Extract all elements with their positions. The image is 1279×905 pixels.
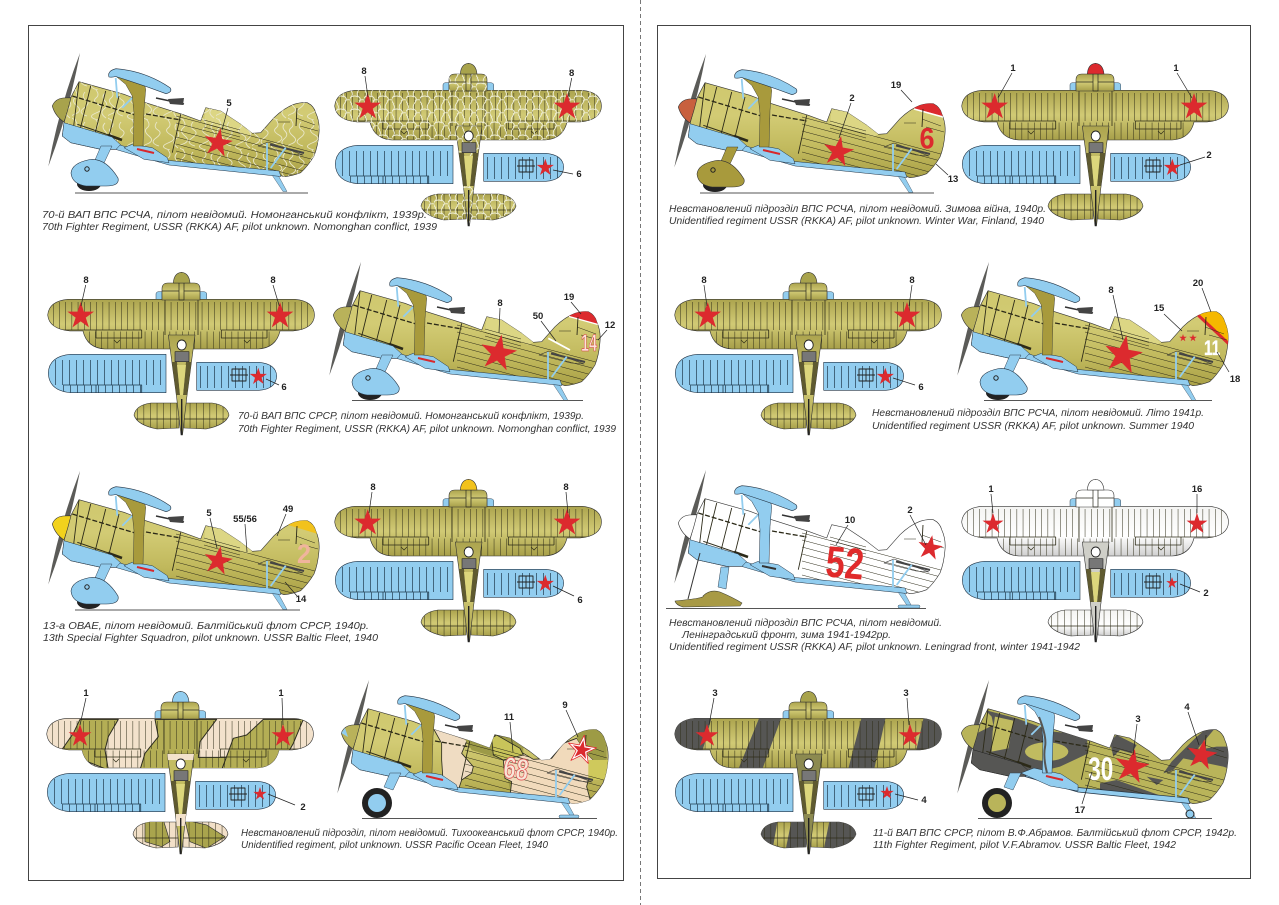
left page frame — [28, 26, 624, 880]
side view callouts: 50 — [533, 311, 543, 322]
top view callouts — [701, 275, 924, 393]
top view: yellow dome — [335, 479, 602, 642]
side view callouts — [206, 504, 307, 605]
top view: dark grey bands — [670, 691, 946, 854]
top view: red dome — [962, 63, 1228, 226]
top view callouts: 1 — [83, 688, 89, 699]
side view: orange tail with red stripe: 11 — [1204, 337, 1220, 360]
top view callouts: 4 — [921, 795, 927, 806]
side view callouts: 14 — [296, 594, 307, 605]
top view callouts: 8 — [563, 482, 569, 493]
side view callouts: 5 — [206, 508, 212, 519]
panel: 70th regiment camouflaged — [42, 53, 602, 233]
caption: 70th Fighter Regiment, USSR (RKKA) AF, pilot unknown. Nomonghan conflict, 1939 — [238, 424, 616, 435]
top view callouts: 8 — [83, 275, 89, 286]
top view callouts: 6 — [576, 169, 582, 180]
side view: peach and green camouflage, wheels: 68 — [501, 751, 531, 788]
side view callouts: 2 — [849, 93, 855, 104]
top view callouts — [709, 688, 927, 806]
panel: 70th regiment number 14 — [48, 262, 616, 435]
side view callouts — [497, 292, 615, 341]
top view callouts: 1 — [1173, 63, 1179, 74]
caption: Unidentified regiment USSR (RKKA) AF, pilot unknown. Leningrad front, winter 1941-1942 — [669, 642, 1080, 653]
caption — [873, 827, 1237, 851]
side view callouts: 3 — [1135, 714, 1141, 725]
panel: 13th squadron Baltic fleet — [43, 471, 602, 644]
caption: Невстановлений підрозділ ВПС РСЧА, пілот невідомий. Літо 1941р. — [872, 408, 1204, 419]
side view: white with skis: 52 — [824, 537, 866, 590]
caption: 11th Fighter Regiment, pilot V.F.Abramov. USSR Baltic Fleet, 1942 — [873, 840, 1176, 851]
side view callouts: 2 — [907, 505, 913, 516]
top view callouts: 6 — [918, 382, 924, 393]
caption: Невстановлений підрозділ ВПС РСЧА, пілот невідомий. Зимова війна, 1940р. — [669, 204, 1046, 215]
caption — [669, 204, 1046, 227]
top view: olive — [675, 272, 942, 435]
side view: orange tail with red stripe — [957, 262, 1235, 407]
top view callouts: 1 — [278, 688, 284, 699]
top view callouts: 1 — [1010, 63, 1016, 74]
side view: grey and olive camouflage, wheels — [957, 680, 1235, 825]
top view callouts — [81, 275, 287, 393]
side view: white squiggle camouflage — [48, 53, 326, 198]
side view callouts: 8 — [1108, 285, 1114, 296]
top view callouts — [988, 484, 1209, 599]
caption: 70th Fighter Regiment, USSR (RKKA) AF, pilot unknown. Nomonghan conflict, 1939 — [42, 222, 437, 233]
caption: 11-й ВАП ВПС СРСР, пілот В.Ф.Абрамов. Балтійський флот СРСР, 1942р. — [873, 827, 1237, 839]
side view callouts — [839, 80, 958, 185]
top view callouts: 3 — [903, 688, 909, 699]
top view callouts — [361, 66, 582, 180]
side view callouts: 8 — [497, 298, 503, 309]
side view callouts: 10 — [845, 515, 855, 526]
side view callouts: 18 — [1230, 374, 1240, 385]
top view callouts: 8 — [701, 275, 707, 286]
top view: olive — [48, 272, 314, 435]
top view callouts — [80, 688, 306, 813]
callout 5 — [222, 98, 232, 130]
side view callouts — [504, 700, 578, 752]
side view: white with skis — [666, 470, 952, 615]
top view callouts: 8 — [370, 482, 376, 493]
callout 5: 5 — [226, 98, 232, 109]
side view callouts: 4 — [1184, 702, 1190, 713]
side view: yellow spinner and tail: 2 — [297, 539, 311, 569]
top view callouts: 1 — [988, 484, 994, 495]
top view callouts — [369, 482, 583, 606]
panel: 11th regiment Abramov — [670, 680, 1237, 854]
side view callouts: 13 — [948, 174, 958, 185]
caption: 70-й ВАП ВПС СРСР, пілот невідомий. Номонганський конфлікт, 1939р. — [238, 410, 584, 422]
side view callouts: 12 — [605, 320, 615, 331]
top view callouts — [998, 63, 1212, 165]
side view callouts: 20 — [1193, 278, 1203, 289]
top view callouts: 2 — [1203, 588, 1209, 599]
caption: 13th Special Fighter Squadron, pilot unknown. USSR Baltic Fleet, 1940 — [43, 633, 378, 644]
side view callouts: 55/56 — [233, 514, 257, 525]
side view callouts: 11 — [504, 712, 515, 723]
top view: cream and olive camouflage — [47, 691, 314, 854]
side view: red tail tip: 14 — [581, 330, 597, 357]
side view callouts: 15 — [1154, 303, 1165, 314]
caption — [872, 408, 1204, 432]
caption: Невстановлений підрозділ ВПС РСЧА, пілот невідомий. — [669, 618, 942, 629]
side view: grey and olive camouflage, wheels: 30 — [1088, 751, 1113, 787]
top view callouts: 3 — [712, 688, 718, 699]
right page frame — [658, 26, 1250, 878]
side view callouts — [836, 505, 926, 545]
centre fold dashed line — [640, 0, 642, 905]
caption: Ленінградський фронт, зима 1941-1942рр. — [681, 629, 891, 641]
top view callouts: 8 — [361, 66, 367, 77]
caption: Unidentified regiment USSR (RKKA) AF, pilot unknown. Summer 1940 — [872, 421, 1194, 432]
side view: yellow spinner and tail — [48, 471, 326, 616]
caption: 13-а ОВАЕ, пілот невідомий. Балтійський флот СРСР, 1940р. — [43, 620, 369, 632]
top view callouts: 6 — [577, 595, 583, 606]
side view callouts — [1075, 702, 1199, 816]
top view callouts: 8 — [909, 275, 915, 286]
side view: red spinner and number 6 — [674, 54, 952, 199]
panel: Leningrad front winter — [666, 470, 1228, 653]
caption — [43, 620, 378, 644]
caption: Невстановлений підрозділ, пілот невідомий. Тихоокеанський флот СРСР, 1940р. — [241, 827, 618, 839]
top view callouts: 16 — [1192, 484, 1202, 495]
side view callouts: 49 — [283, 504, 293, 515]
caption: Unidentified regiment, pilot unknown. USSR Pacific Ocean Fleet, 1940 — [241, 840, 548, 851]
caption — [241, 827, 618, 851]
side view callouts: 19 — [564, 292, 574, 303]
panel: Pacific fleet — [47, 680, 618, 854]
side view: red tail tip — [329, 262, 607, 407]
top view: white — [962, 479, 1228, 642]
caption: Unidentified regiment USSR (RKKA) AF, pilot unknown. Winter War, Finland, 1940 — [669, 216, 1044, 227]
caption — [42, 209, 437, 233]
panel: summer 1941 — [675, 262, 1240, 435]
caption — [238, 410, 616, 435]
side view callouts — [1108, 278, 1240, 385]
caption — [669, 618, 1080, 653]
top view callouts: 2 — [300, 802, 306, 813]
top view callouts: 8 — [270, 275, 276, 286]
top view callouts: 6 — [281, 382, 287, 393]
top view: squiggle camouflage — [335, 63, 602, 226]
caption: 70-й ВАП ВПС РСЧА, пілот невідомий. Номонганський конфлікт, 1939р. — [42, 209, 427, 221]
top view callouts: 2 — [1206, 150, 1212, 161]
panel: winter war — [669, 54, 1228, 227]
top view callouts: 8 — [569, 68, 574, 79]
side view callouts: 19 — [891, 80, 901, 91]
side view: peach and green camouflage, wheels — [337, 680, 615, 825]
side view callouts: 9 — [562, 700, 568, 711]
side view: red spinner and number 6: 6 — [920, 122, 934, 156]
side view callouts: 17 — [1075, 805, 1085, 816]
